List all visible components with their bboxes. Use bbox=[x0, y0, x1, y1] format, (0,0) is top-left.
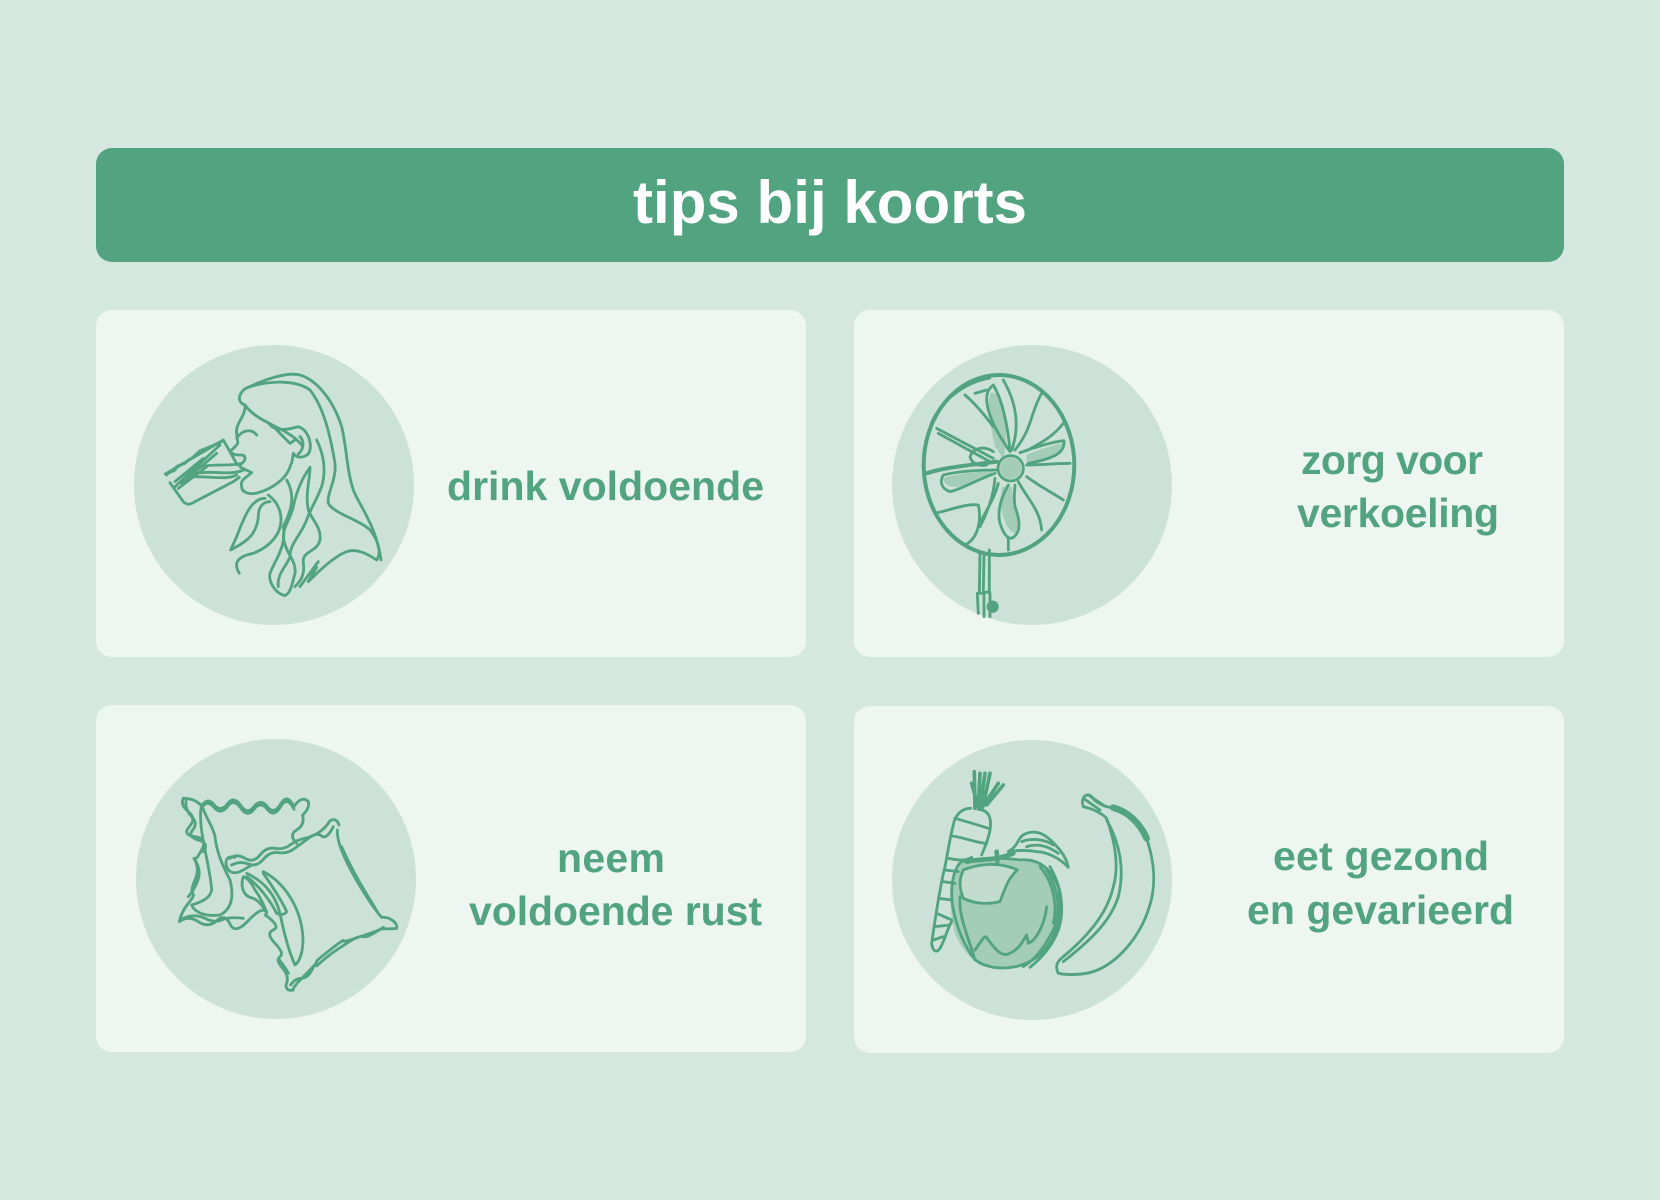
label: eet gezond en gevarieerd: eet gezond bbox=[1273, 833, 1489, 879]
label: eet gezond en gevarieerd bbox=[1247, 833, 1514, 933]
icon: carrot, apple and banana bbox=[892, 740, 1172, 1020]
label: neem voldoende rust bbox=[469, 835, 762, 934]
panel: eet gezond en gevarieerd bbox=[854, 706, 1564, 1053]
label: eet gezond en gevarieerd: en gevarieerd bbox=[1247, 887, 1514, 933]
label: neem voldoende rust: voldoende rust bbox=[469, 888, 762, 934]
panel: zorg voor verkoeling bbox=[854, 310, 1564, 657]
panel: drink voldoende bbox=[96, 310, 806, 657]
label: neem voldoende rust: neem bbox=[557, 835, 665, 881]
label: zorg voor verkoeling: zorg voor bbox=[1301, 437, 1483, 483]
title: tips bij koorts bbox=[633, 169, 1027, 236]
panel: neem voldoende rust bbox=[96, 705, 806, 1052]
label: drink voldoende: drink voldoende bbox=[447, 463, 764, 509]
label: zorg voor verkoeling bbox=[1297, 437, 1499, 536]
icon: woman drinking from a glass bbox=[134, 345, 414, 625]
title banner bbox=[96, 148, 1564, 262]
icon: standing fan bbox=[892, 345, 1172, 625]
icon: pillows bbox=[136, 739, 416, 1019]
label: zorg voor verkoeling: verkoeling bbox=[1297, 490, 1499, 536]
